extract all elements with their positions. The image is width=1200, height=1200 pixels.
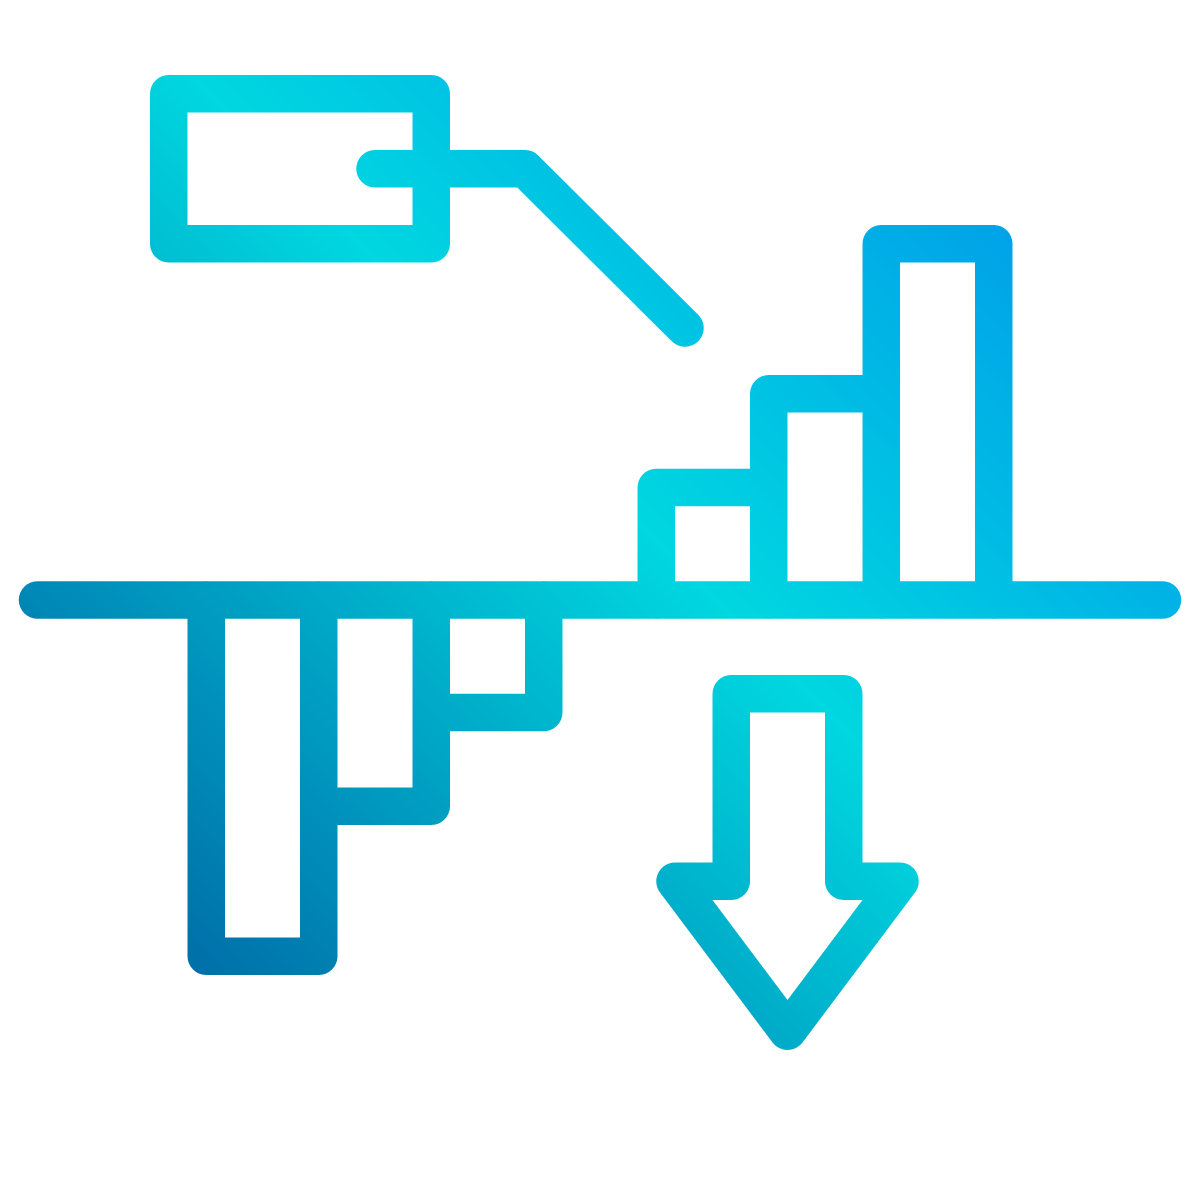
bar chart: rising bars (656, 244, 994, 600)
icon: price tag with string and chart with arrow (38, 94, 1162, 1031)
icon: price tag (169, 94, 431, 244)
icon: down arrow (675, 694, 900, 1031)
icon: tag string (375, 169, 685, 328)
chart baseline (38, 581, 1162, 619)
bar chart: falling bars (206, 600, 544, 956)
